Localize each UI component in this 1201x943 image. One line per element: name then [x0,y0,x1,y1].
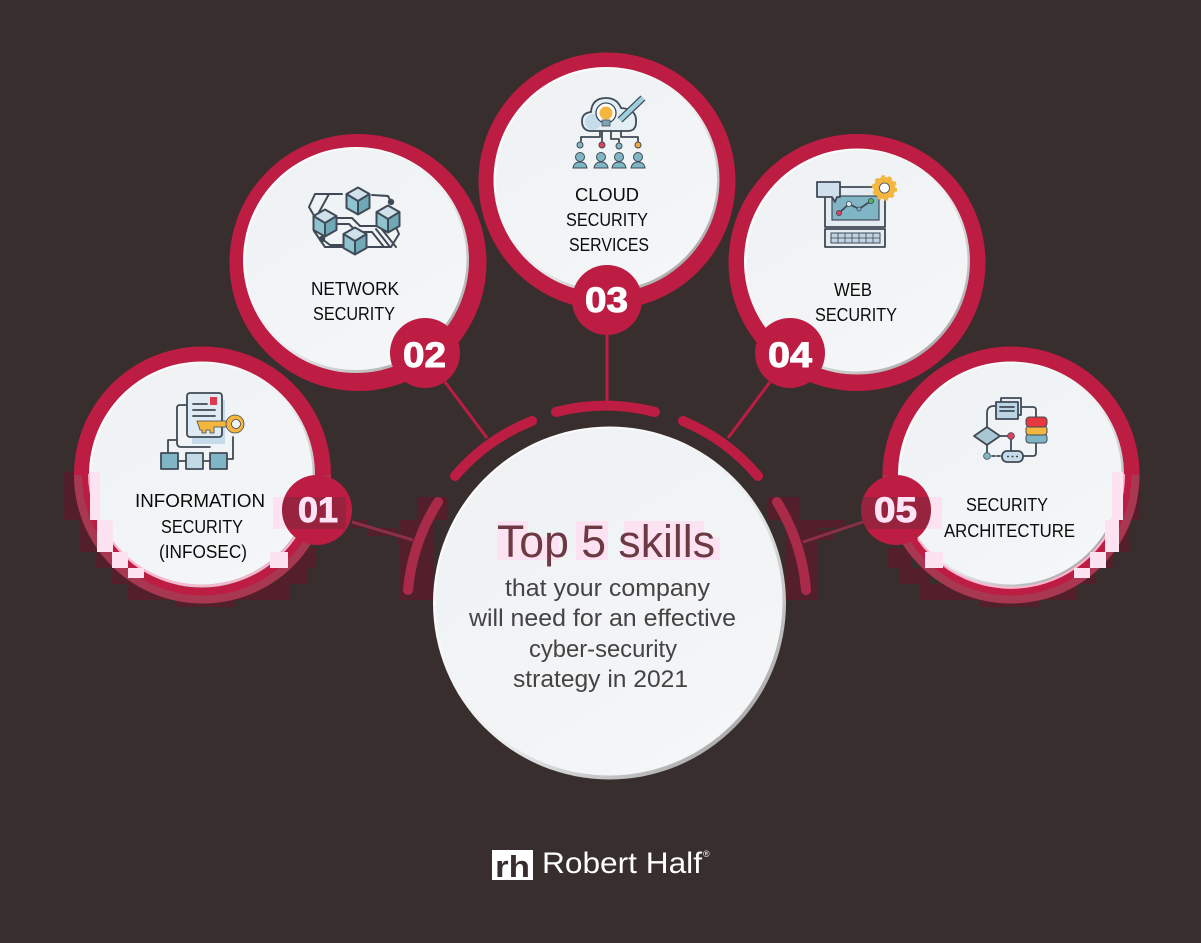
label: cloud security services: SECURITY [566,210,648,230]
disc 04 [744,148,970,374]
subtitle: cyber-security [529,636,677,663]
subtitle: will need for an effective [468,605,736,632]
label: web security: SECURITY [815,305,897,325]
title highlight [497,521,720,560]
subtitle: that your company [505,575,710,602]
registered mark: ® [703,849,710,859]
arcs around central circle [408,406,806,590]
logo wordmark: Robert Half [542,847,703,880]
label: information security: (INFOSEC) [159,542,247,562]
central disc [433,426,786,780]
logo: Robert Half [492,847,710,884]
label: information security: SECURITY [161,517,243,537]
badge 01 [282,475,352,545]
label: cloud security services: SERVICES [569,235,649,255]
disc 03 [494,67,720,293]
badge 02 [390,318,460,388]
ring 04 [728,134,986,391]
ring 03 [478,52,736,310]
label: cloud security services: CLOUD [575,185,639,205]
logo mark: rh [495,849,530,884]
label: web security [815,280,897,325]
disc 01 [89,362,315,588]
panel: central circle [433,426,786,780]
icon: network blocks [309,188,400,254]
badge 05 [861,475,931,545]
ring 05 [882,346,1140,604]
badge 03 [572,265,642,335]
panel: information security [74,346,352,604]
ring 02 [230,134,486,391]
connector lines [352,335,863,542]
icon: document and key [161,393,244,469]
label: network security [311,279,399,324]
label: network security: NETWORK [311,279,399,299]
badge 01: 01 [298,491,338,530]
ring 01 [74,346,331,604]
label: information security: INFORMATION [135,491,265,511]
panel: network security [230,134,486,391]
icon: architecture flow [974,398,1047,462]
disc 02 [243,147,469,373]
label: security architecture: SECURITY [966,495,1048,515]
panel: security architecture [861,346,1140,604]
badge 02: 02 [403,336,446,375]
label: security architecture: ARCHITECTURE [944,521,1075,541]
icon: cloud and team [573,98,645,168]
label: network security: SECURITY [313,304,395,324]
subtitle: strategy in 2021 [513,666,688,693]
label: security architecture [944,495,1075,541]
disc 05 [898,362,1124,588]
panel: web security [728,134,986,391]
badge 04: 04 [768,336,813,375]
subtitle [468,575,736,693]
title: Top 5 skills [497,516,715,567]
label: cloud security services [566,185,649,255]
label: information security [135,491,265,562]
badge 03: 03 [585,281,628,320]
icon: computer with chart [817,177,896,247]
panel: cloud security services [478,52,736,335]
badge 04 [755,318,825,388]
label: web security: WEB [834,280,872,300]
badge 05: 05 [874,491,917,530]
